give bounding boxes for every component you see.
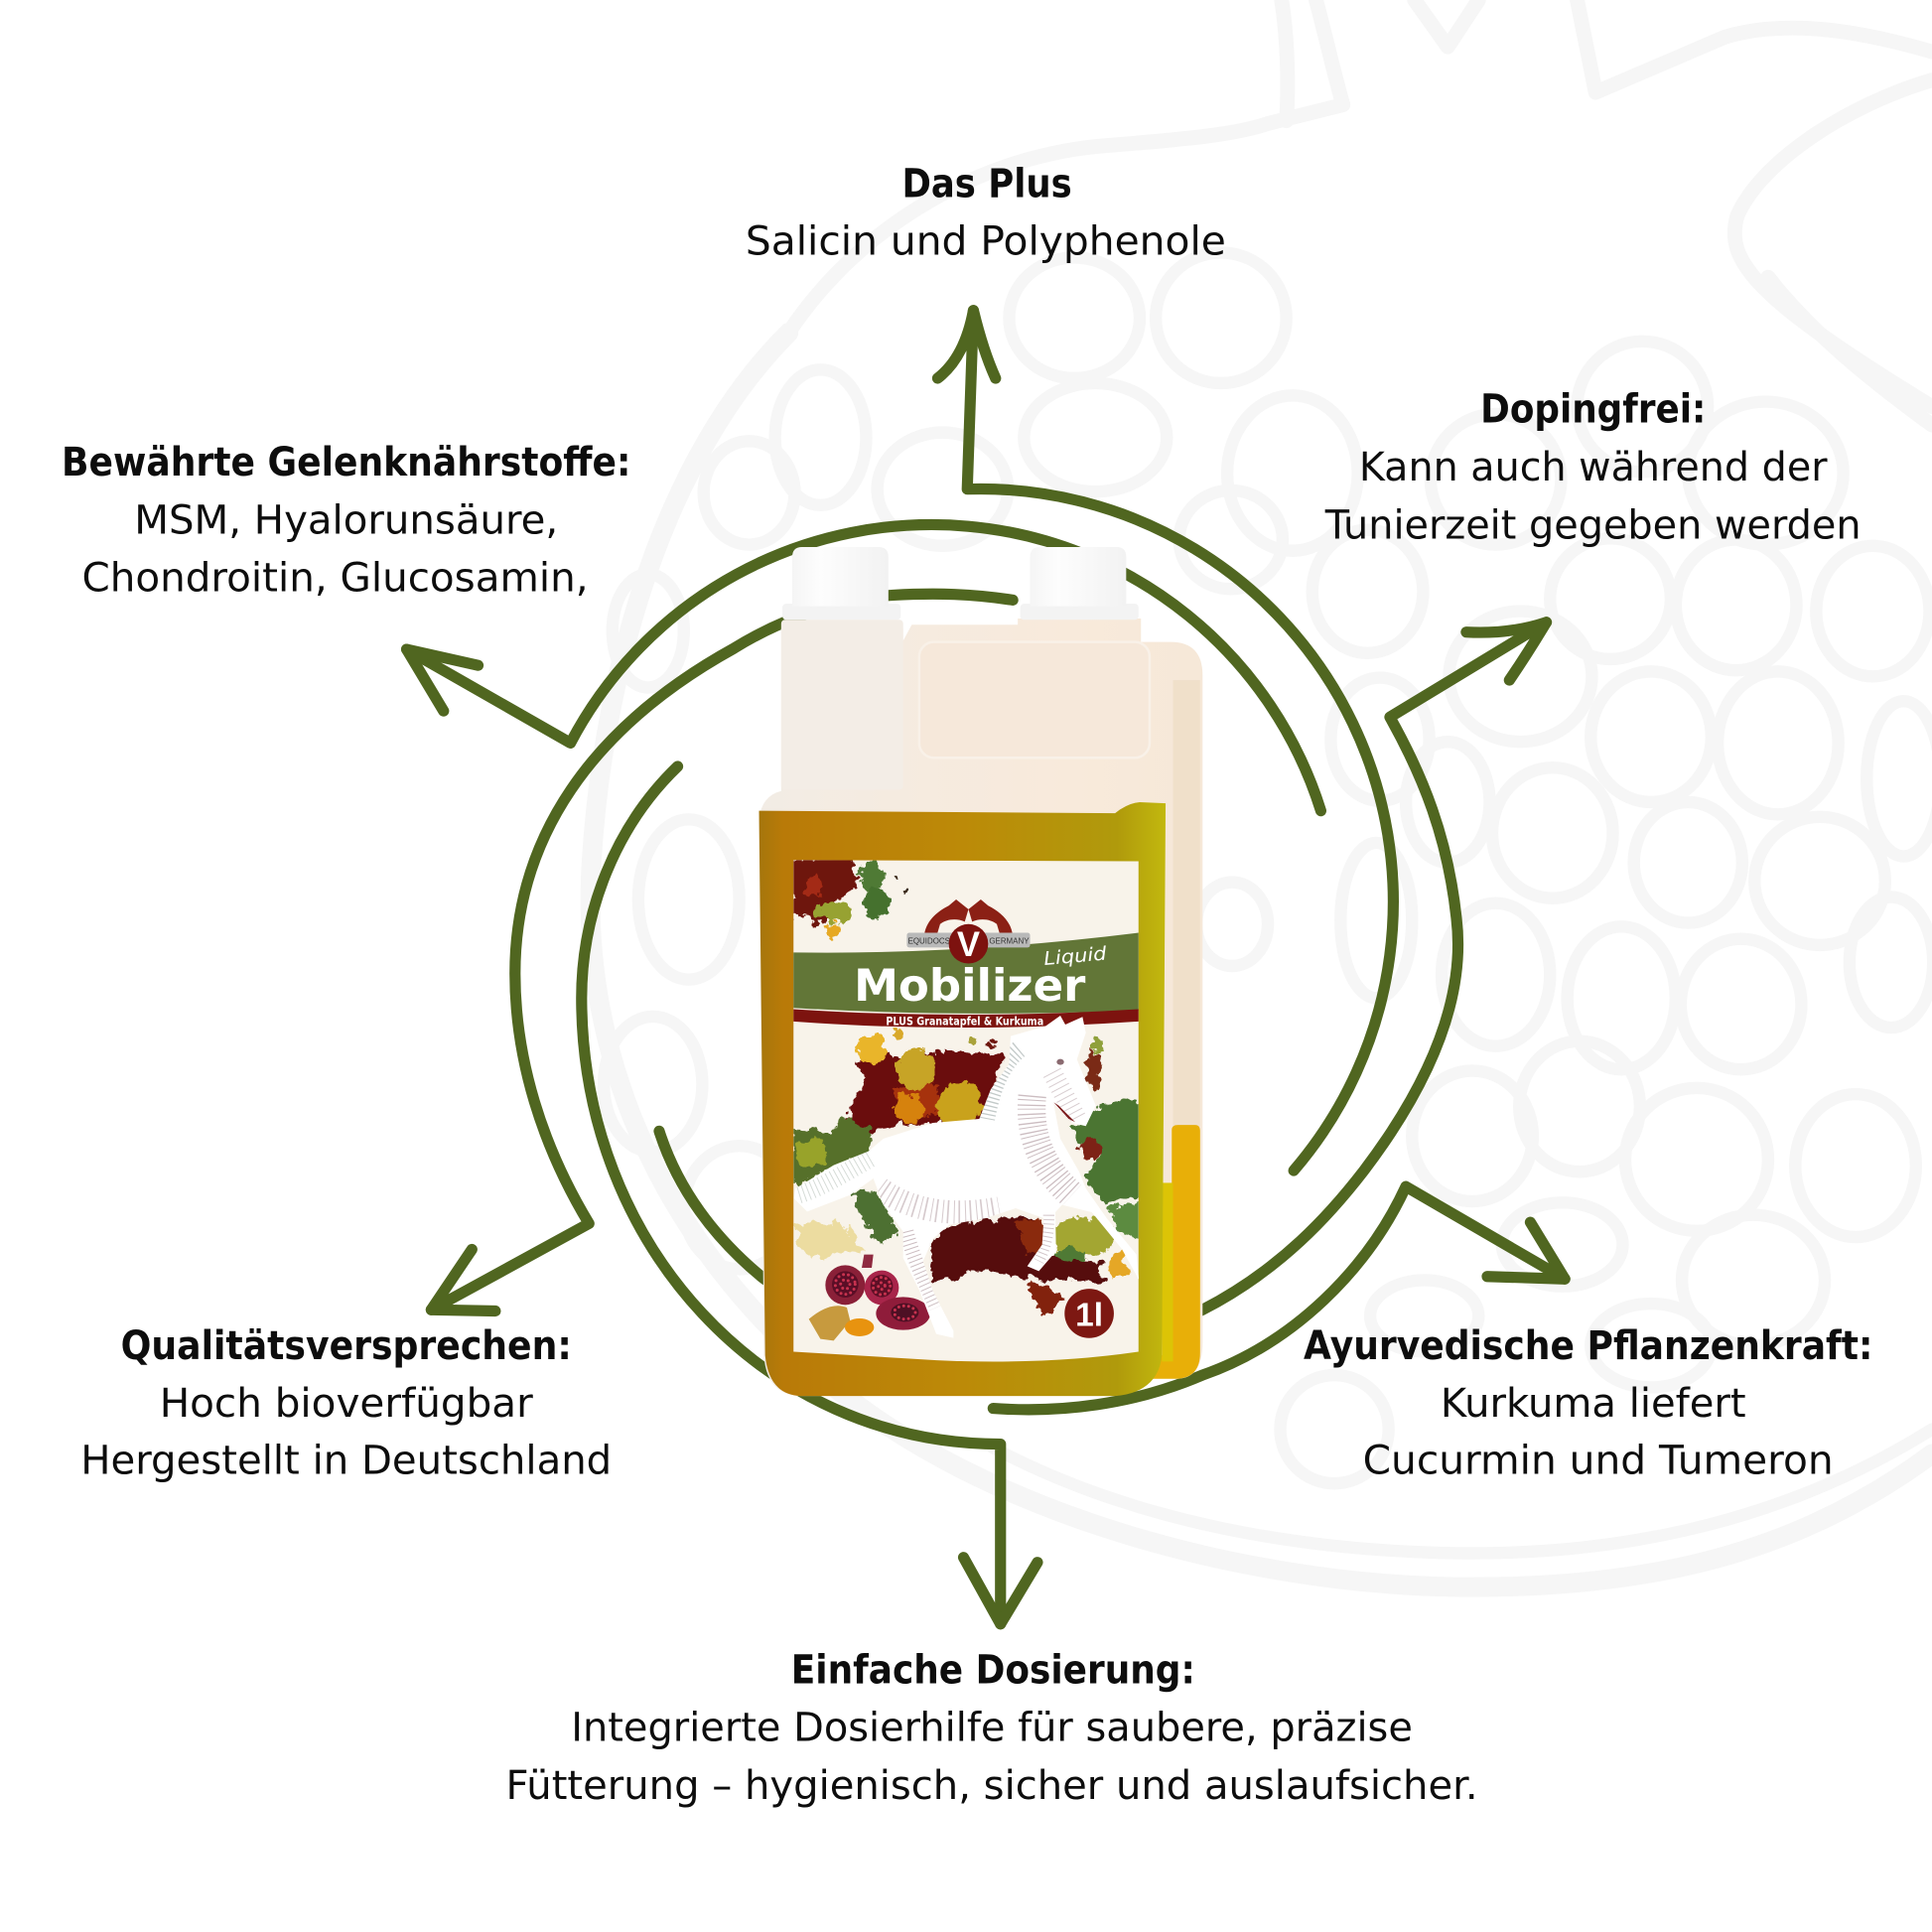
text: Einfache Dosierung: Einfache Dosierung: [791, 1646, 1195, 1693]
text: Bewährte Gelenknährstoffe: Chondroitin, Glucosamin, [82, 555, 589, 602]
bottle: handle channel [1152, 680, 1200, 1379]
label: plus line: PLUS Granatapfel & Kurkuma [886, 1016, 1043, 1029]
arrow: down to Einfache Dosierung [582, 766, 1037, 1624]
text: Das Plus: Salicin und Polyphenole [746, 217, 1226, 264]
text: Ayurvedische Pflanzenkraft: Cucurmin und Tumeron [1363, 1437, 1834, 1483]
text: Dopingfrei: Dopingfrei: [1480, 386, 1706, 433]
text: Ayurvedische Pflanzenkraft: Kurkuma liefert [1441, 1380, 1746, 1427]
bottle: left cap [782, 547, 900, 620]
text: Einfache Dosierung: Fütterung – hygienisch, sicher und auslaufsicher. [505, 1762, 1478, 1809]
label: green band [793, 932, 1139, 1014]
text: Dopingfrei: Kann auch während der [1359, 444, 1828, 490]
arrow: to Ayurvedische Pflanzenkraft [993, 1186, 1565, 1410]
text: Qualitätsversprechen: Hoch bioverfügbar [160, 1380, 533, 1427]
bottle: dosing chamber [919, 642, 1150, 758]
label: illustration splashes [790, 1030, 1145, 1315]
label: volume badge: 1l [1075, 1297, 1103, 1333]
text: Qualitätsversprechen: Qualitätsversprechen: [121, 1322, 572, 1369]
text: Ayurvedische Pflanzenkraft: Ayurvedische Pflanzenkraft: [1304, 1322, 1872, 1369]
arrow: to Bewährte Gelenknährstoffe [407, 524, 1320, 811]
text: Einfache Dosierung [505, 1646, 1478, 1809]
bottle: right cap [1021, 547, 1139, 620]
label: brand logo: GERMANY [989, 937, 1030, 946]
label: volume badge [1064, 1289, 1114, 1338]
background: faint pomegranate line art [591, 0, 1932, 1587]
bottle: left neck shade [781, 620, 903, 790]
bottle: liquid [759, 802, 1166, 1396]
label: brand logo: EQUIDOCS [908, 937, 950, 946]
text: Dopingfrei [1324, 386, 1862, 548]
bottle: plastic body [759, 619, 1202, 1396]
label: pomegranate and turmeric [809, 1255, 930, 1340]
text: Qualitätsversprechen [80, 1322, 612, 1483]
text: Das Plus [746, 161, 1226, 264]
text: Bewährte Gelenknährstoffe: Bewährte Gelenknährstoffe: [62, 439, 630, 485]
label: red ribbon [793, 1009, 1139, 1028]
label: brand logo: V [957, 926, 980, 964]
text: Bewährte Gelenknährstoffe: MSM, Hyalorunsäure, [134, 496, 558, 543]
label: product name: Mobilizer [854, 960, 1085, 1012]
text: Dopingfrei: Tunierzeit gegeben werden [1324, 501, 1862, 548]
text: Bewährte Gelenknährstoffe [62, 439, 630, 602]
text: Qualitätsversprechen: Hergestellt in Deutschland [80, 1437, 612, 1483]
arrow: to Qualitätsversprechen [431, 594, 1013, 1311]
product bottle [759, 547, 1202, 1396]
label: top splash [790, 857, 907, 939]
arrow: up to Das Plus [937, 311, 1393, 1171]
label: brand logo [906, 899, 1031, 964]
bottle: label [790, 857, 1145, 1361]
text: Einfache Dosierung: Integrierte Dosierhilfe für saubere, präzise [571, 1705, 1413, 1751]
arrow: to Dopingfrei [659, 622, 1547, 1346]
text: Das Plus: Das Plus [901, 161, 1072, 207]
label: liquid wordmark: Liquid [1043, 944, 1108, 970]
label: white horse [794, 1016, 1139, 1338]
text: Ayurvedische Pflanzenkraft [1304, 1322, 1872, 1483]
